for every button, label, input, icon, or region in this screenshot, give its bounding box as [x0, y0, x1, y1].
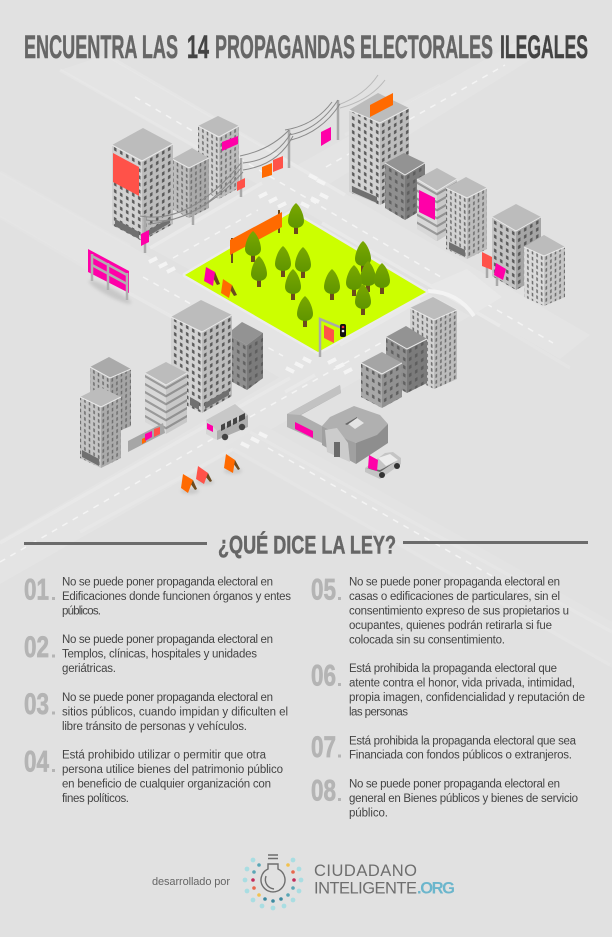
billboard: orange in park — [230, 210, 282, 263]
overpass bridge — [428, 269, 502, 316]
buildings: lower right group — [361, 297, 457, 408]
A-frame signs on street — [181, 454, 242, 494]
sign: orange hanging from wire — [262, 163, 272, 178]
title — [24, 29, 588, 65]
rule 07: Financiada con fondos públicos o extranjeros. — [349, 750, 572, 762]
rule 04: 04 — [24, 746, 49, 778]
park lawn — [185, 212, 426, 352]
rule 08: 08 — [311, 774, 336, 808]
rule 03: libre tránsito de personas y vehículos. — [62, 721, 247, 733]
section heading: ¿QUÉ DICE LA LEY? — [218, 530, 396, 560]
rule 06 — [311, 660, 585, 718]
rule 02 — [24, 631, 273, 675]
rule 04: persona utilice bienes del patrimonio público — [62, 764, 283, 776]
rule 04: en beneficio de cualquier organización con — [62, 778, 271, 790]
rule 04: Está prohibido utilizar o permitir que otra — [62, 750, 267, 762]
utility poles and wires — [140, 75, 385, 253]
billboard: orange on rooftop — [370, 93, 393, 117]
logo wordmark: INTELIGENTE — [314, 879, 417, 897]
rule 03: sitios públicos, cuando impidan y dificulten el — [62, 706, 288, 718]
title: ENCUENTRA LAS — [24, 29, 178, 65]
rule 05: 05 — [311, 574, 336, 606]
logo: light bulb with dots — [243, 855, 303, 910]
rule 07 — [311, 731, 577, 764]
billboard: red on tower — [113, 153, 139, 196]
sign: magenta hanging from wire — [321, 127, 331, 146]
sign: red hanging from wire — [273, 156, 283, 172]
sign: magenta post sign — [494, 263, 506, 286]
logo wordmark — [314, 862, 455, 897]
rule 08: público. — [349, 808, 388, 820]
rule 01: 01 — [24, 574, 49, 606]
rule 02: 02 — [24, 631, 49, 664]
rule 05: colocada sin su consentimiento. — [349, 634, 505, 646]
billboard: magenta on striped building — [419, 190, 435, 220]
rule 04 — [24, 746, 283, 805]
car with magenta sign — [365, 452, 401, 479]
bus with magenta poster — [206, 404, 248, 440]
rule 05: casas o edificaciones de particulares, sin el — [349, 591, 560, 603]
title: 14 — [187, 29, 209, 65]
rule 06: Está prohibida la propaganda electoral que — [349, 663, 557, 675]
rule 04: fines políticos. — [62, 793, 129, 805]
rule 05 — [311, 574, 569, 646]
rule 06: propia imagen, confidencialidad y reputación de — [349, 692, 585, 704]
rule 01 — [24, 574, 291, 618]
street grid — [0, 40, 612, 668]
sign: red post sign — [482, 252, 492, 278]
rule 05: consentimiento expreso de sus propietarios u — [349, 606, 569, 618]
traffic light pole with red sign — [320, 319, 346, 357]
rule 01: No se puede poner propaganda electoral en — [62, 576, 273, 588]
billboard: magenta roadside — [87, 249, 133, 307]
rule 02: No se puede poner propaganda electoral en — [62, 634, 273, 646]
rule 03: No se puede poner propaganda electoral en — [62, 692, 273, 704]
low wall with posters — [128, 423, 165, 452]
rule 02: geriátricas. — [62, 663, 116, 675]
rule 06: las personas — [349, 706, 408, 718]
rule 05: No se puede poner propaganda electoral en — [349, 576, 560, 588]
buildings: lower left group — [80, 300, 263, 468]
rule 02: Templos, clínicas, hospitales y unidades — [62, 648, 257, 660]
credit text: desarrollado por — [152, 876, 230, 888]
buildings: upper right row — [349, 93, 565, 306]
sign: orange A-frame in park — [221, 279, 237, 298]
rule 06: 06 — [311, 660, 336, 692]
civic building with wall and poster — [287, 385, 388, 464]
rule 06: atente contra el honor, vida privada, intimidad, — [349, 678, 575, 690]
logo wordmark: .ORG — [417, 879, 455, 897]
sign: magenta on pole — [141, 230, 149, 246]
rule 01: públicos. — [62, 606, 101, 618]
rule 08: No se puede poner propaganda electoral en — [349, 778, 560, 790]
rule 03 — [24, 688, 288, 733]
sign: red on pole — [237, 178, 245, 191]
sign: magenta A-frame in park — [204, 267, 220, 286]
rule 05: ocupantes, quienes podrán retirarla si fue — [349, 620, 552, 632]
rule 08: general en Bienes públicos y bienes de servicio — [349, 793, 578, 805]
rule 07: Está prohibida la propaganda electoral que sea — [349, 736, 577, 748]
rule 01: Edificaciones donde funcionen órganos y entes — [62, 591, 291, 603]
rule 07: 07 — [311, 731, 336, 764]
rule 03: 03 — [24, 688, 49, 721]
building: red billboard tower group — [112, 116, 239, 241]
trees in park — [245, 203, 390, 327]
section heading — [24, 530, 588, 560]
logo wordmark: CIUDADANO — [314, 862, 417, 880]
rule 08 — [311, 774, 578, 820]
billboard: magenta on back tower — [222, 136, 238, 151]
